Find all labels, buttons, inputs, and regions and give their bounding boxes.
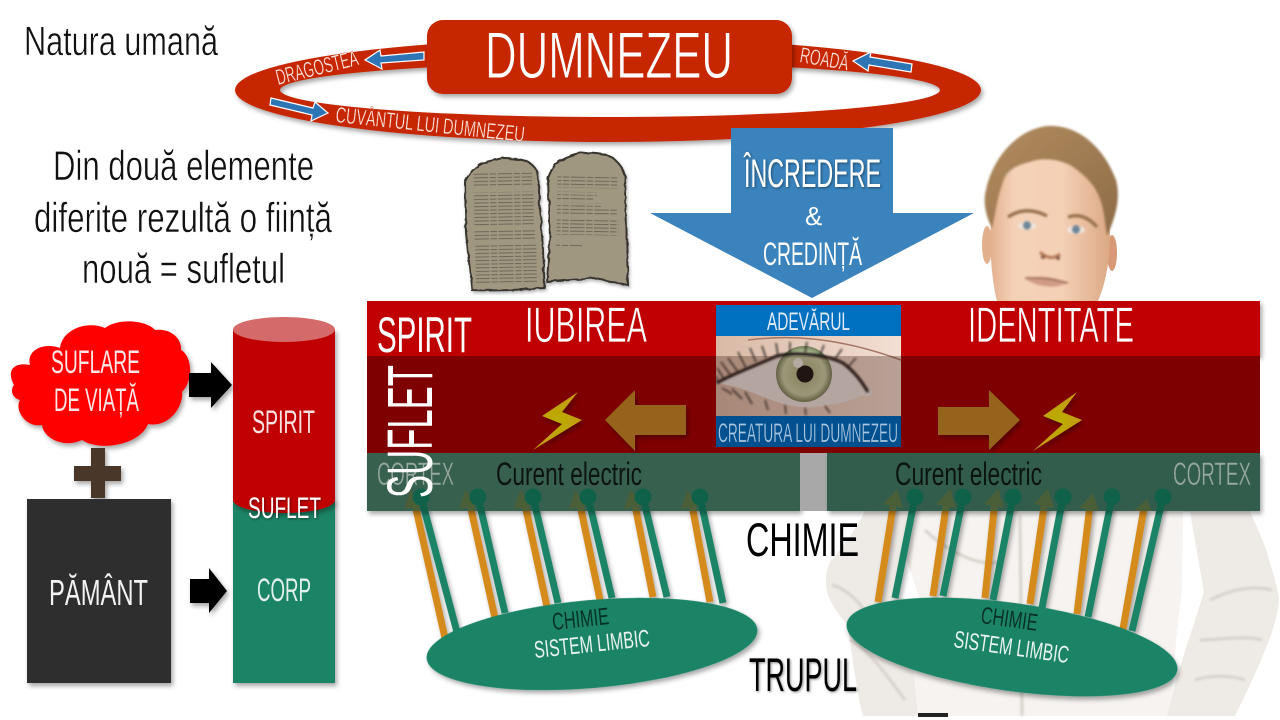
person: torso and shirt	[826, 511, 1279, 717]
gap: right of torso	[1172, 512, 1204, 692]
label: CHIMIE: CHIMIE	[746, 513, 859, 566]
cylinder: spirit, suflet, corp	[233, 317, 335, 683]
cloud: SUFLARE DE VIAȚĂ	[11, 321, 190, 446]
band: suflet	[367, 356, 1260, 453]
label: Curent electric right: Curent electric	[895, 456, 1042, 492]
cylinder: spirit, suflet, corp: SPIRIT	[252, 404, 315, 440]
box: DUMNEZEU	[427, 18, 792, 94]
arrow: ÎNCREDERE & CREDINȚĂ: ÎNCREDERE	[743, 151, 881, 196]
label: IDENTITATE: IDENTITATE	[968, 297, 1134, 353]
cylinder: spirit, suflet, corp: CORP	[257, 572, 311, 608]
arrow shafts inside cortex	[412, 504, 1164, 511]
arrows: green chemistry lines	[421, 497, 1163, 632]
arrow: ÎNCREDERE & CREDINȚĂ: CREDINȚĂ	[763, 236, 862, 272]
arrow: cloud to spirit	[189, 362, 232, 408]
arrow: brown right	[938, 390, 1020, 450]
arrow: roadă	[853, 52, 912, 72]
label: DRAGOSTEA: DRAGOSTEA	[273, 45, 361, 90]
gap: left of torso	[898, 555, 920, 600]
gap between cortex bands	[800, 453, 827, 511]
box: PĂMÂNT: PĂMÂNT	[49, 572, 148, 613]
label: CORTEX left: CORTEX	[377, 456, 454, 492]
ellipse: sistem limbic right: CHIMIE	[979, 602, 1039, 637]
label: SPIRIT band: SPIRIT	[377, 307, 472, 363]
arrow: earth to body	[190, 568, 227, 613]
cylinder: spirit, suflet, corp: SUFLET	[248, 492, 321, 525]
ellipse: sistem limbic left	[423, 586, 761, 702]
box: DUMNEZEU: DUMNEZEU	[485, 18, 733, 92]
arrows: orange chemistry lines	[414, 500, 1144, 638]
label: IUBIREA: IUBIREA	[525, 297, 647, 353]
icon: lightning left	[533, 392, 582, 450]
eye panel: ADEVĂRUL	[767, 307, 850, 336]
arrow: ÎNCREDERE & CREDINȚĂ: &	[805, 201, 822, 231]
cloud: SUFLARE DE VIAȚĂ: DE VIAȚĂ	[54, 382, 139, 418]
ellipse: sistem limbic right	[841, 580, 1183, 714]
ellipse: sistem limbic right: SISTEM LIMBIC	[952, 626, 1071, 669]
band: cortex left	[367, 453, 800, 511]
box: PĂMÂNT	[27, 499, 171, 683]
ellipse: sistem limbic left: SISTEM LIMBIC	[533, 625, 651, 664]
arrow: brown left	[605, 390, 686, 451]
band: spirit	[367, 301, 1260, 356]
label: TRUPUL: TRUPUL	[749, 648, 857, 701]
icon: plus	[74, 448, 121, 498]
label: CREATURA LUI DUMNEZEU	[716, 416, 901, 447]
arrow: dragostea	[365, 50, 424, 69]
synapse circles	[412, 488, 1172, 506]
label: ROADĂ: ROADĂ	[798, 42, 851, 75]
eye panel: CREATURA LUI DUMNEZEU	[718, 418, 898, 448]
arrow: ÎNCREDERE & CREDINȚĂ	[650, 128, 974, 298]
ellipse: sistem limbic left: CHIMIE	[551, 603, 610, 636]
intro text block	[34, 142, 332, 292]
intro text block: diferite rezultă o ființă	[34, 194, 332, 241]
band: cortex right	[827, 453, 1260, 511]
arrowheads	[404, 489, 1152, 511]
icon: lightning right	[1033, 392, 1082, 451]
arrow: cuvântul	[270, 98, 328, 121]
ring around God	[235, 18, 981, 147]
cloud: SUFLARE DE VIAȚĂ: SUFLARE	[51, 344, 140, 380]
intro text block: Din două elemente	[53, 142, 314, 189]
icon: stone tablets	[465, 153, 628, 290]
label: Curent electric left: Curent electric	[496, 456, 642, 492]
label: ADEVĂRUL	[716, 305, 901, 336]
title: Natura umană: Natura umană	[24, 18, 218, 64]
eye panel	[716, 305, 901, 448]
person: head	[982, 126, 1118, 301]
label: CUVÂNTUL LUI DUMNEZEU: CUVÂNTUL LUI DUMNEZEU	[334, 102, 526, 147]
label: SUFLET vertical: SUFLET	[374, 365, 446, 498]
intro text block: nouă = sufletul	[82, 245, 285, 292]
